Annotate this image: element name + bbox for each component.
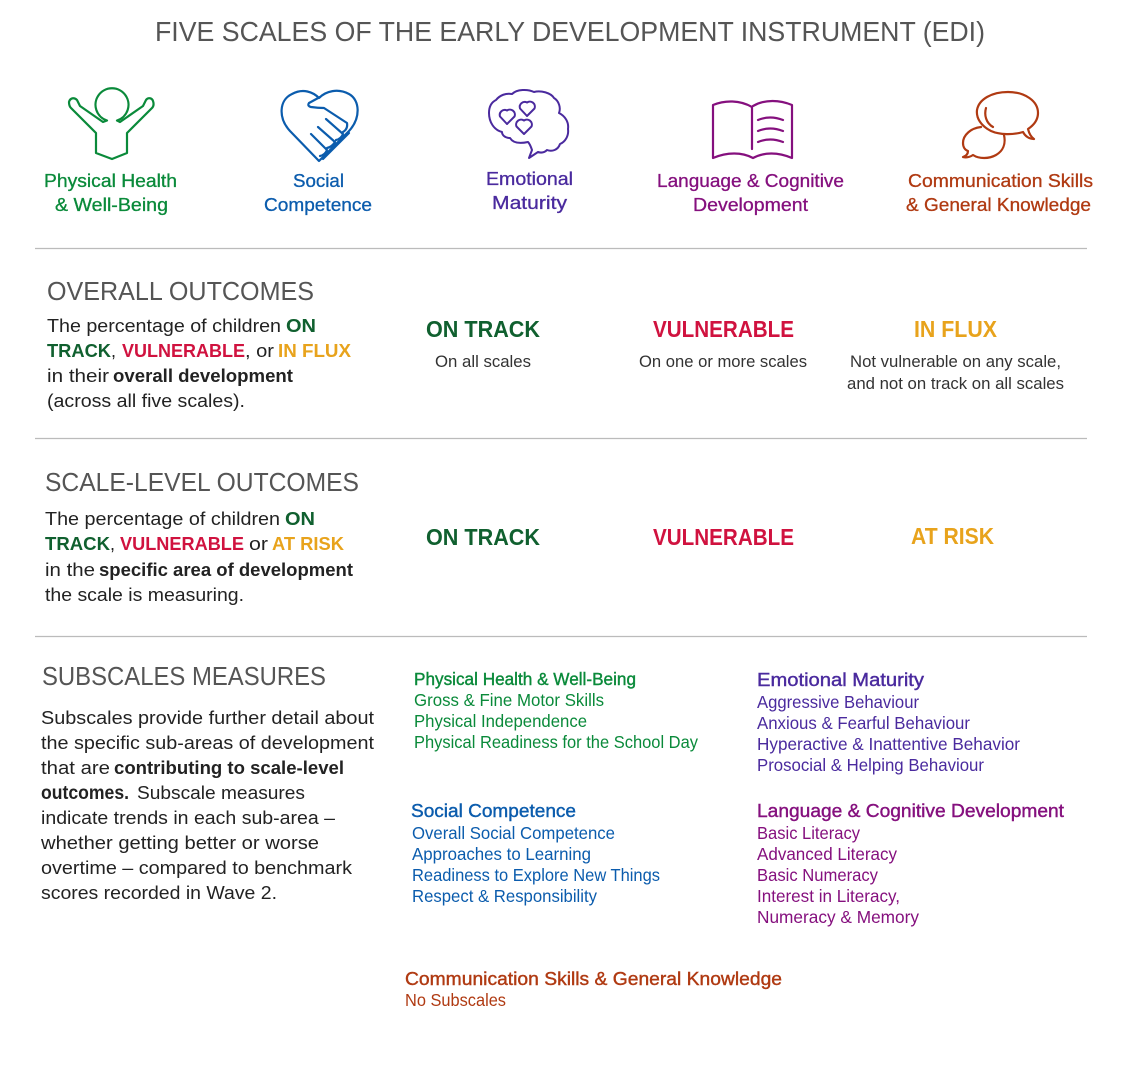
outcome: on track: ON TRACK xyxy=(426,316,540,342)
label: emotional maturity: Emotional xyxy=(486,169,573,189)
label: communication skills: & General Knowledge xyxy=(906,195,1091,215)
list: physical health subscales: Physical Health & Well-Being xyxy=(414,669,636,689)
list: language and cognitive subscales: Basic Literacy xyxy=(757,823,860,843)
text block: subscales description: contributing to scale-level xyxy=(114,758,344,778)
text block: subscales description: whether getting better or worse xyxy=(40,833,319,853)
text block: scale-level description: or xyxy=(249,534,268,554)
outcome: vulnerable: VULNERABLE xyxy=(653,316,794,342)
text block: scale-level description: TRACK xyxy=(45,534,110,554)
text block: scale-level description: AT RISK xyxy=(272,534,344,554)
icon: person with raised arms xyxy=(69,88,154,159)
text block: overall outcomes description: The percentage of children xyxy=(47,316,281,336)
text block: subscales description: Subscale measures xyxy=(137,783,305,803)
list: physical health subscales xyxy=(414,669,698,752)
outcome: vulnerable xyxy=(639,316,807,371)
text block: overall outcomes description: in their xyxy=(47,366,109,386)
list: emotional maturity subscales xyxy=(757,670,1020,775)
text block: subscales description: indicate trends in each sub-area – xyxy=(41,808,335,828)
text block: subscales description: Subscales provide further detail about xyxy=(41,708,374,728)
label: social competence: Competence xyxy=(264,195,372,215)
icon: brain with hearts xyxy=(489,90,568,158)
label: physical health xyxy=(44,171,177,215)
text block: overall outcomes description: , or xyxy=(245,341,274,361)
list: emotional maturity subscales: Emotional Maturity xyxy=(757,670,924,690)
icon: speech bubbles xyxy=(963,92,1038,158)
outcome: at risk: AT RISK xyxy=(911,523,994,549)
label: emotional maturity xyxy=(486,169,573,213)
text block: subscales description: overtime – compared to benchmark xyxy=(41,858,353,878)
list: language and cognitive subscales: Numeracy & Memory xyxy=(757,907,919,927)
outcome: in flux: IN FLUX xyxy=(914,316,998,342)
icon: heart handshake xyxy=(282,91,358,161)
text block: overall outcomes description: IN FLUX xyxy=(278,341,351,361)
label: emotional maturity: Maturity xyxy=(492,193,567,213)
scale: social competence xyxy=(264,91,372,215)
text block: scale-level description: The percentage of children xyxy=(45,509,280,529)
icon: open book xyxy=(713,101,792,158)
outcome: on track xyxy=(426,316,540,371)
outcome: in flux xyxy=(847,316,1064,393)
text block: overall outcomes description: VULNERABLE xyxy=(122,341,245,361)
outcome: vulnerable: On one or more scales xyxy=(639,352,807,371)
outcome: in flux: Not vulnerable on any scale, xyxy=(850,352,1061,371)
label: language and cognitive development: Language & Cognitive xyxy=(657,171,844,191)
list: emotional maturity subscales: Aggressive Behaviour xyxy=(757,692,919,712)
list: social competence subscales: Respect & Responsibility xyxy=(412,886,597,906)
text block: overall outcomes description: (across all five scales). xyxy=(47,391,245,411)
text block: overall outcomes description: TRACK xyxy=(47,341,111,361)
list: language and cognitive subscales: Language & Cognitive Development xyxy=(757,801,1064,821)
list: social competence subscales: Approaches to Learning xyxy=(412,844,591,864)
list: language and cognitive subscales: Advanced Literacy xyxy=(757,844,897,864)
scale: emotional maturity xyxy=(486,90,573,213)
list: communication skills subscales: No Subscales xyxy=(405,990,506,1010)
text block: scale-level description: in the xyxy=(45,560,95,580)
list: physical health subscales: Physical Independence xyxy=(414,711,587,731)
list: language and cognitive subscales xyxy=(757,801,1064,927)
list: social competence subscales: Readiness to Explore New Things xyxy=(412,865,660,885)
title: FIVE SCALES OF THE EARLY DEVELOPMENT INSTRUMENT (EDI) xyxy=(155,16,985,47)
outcome: vulnerable: VULNERABLE xyxy=(653,524,794,550)
text block: overall outcomes description: , xyxy=(111,341,116,361)
heading: scale-level outcomes: SCALE-LEVEL OUTCOMES xyxy=(45,467,359,497)
text block: subscales description: that are xyxy=(41,758,110,778)
label: social competence xyxy=(264,171,372,215)
list: social competence subscales: Social Competence xyxy=(411,801,576,821)
text block: overall outcomes description xyxy=(47,316,351,411)
text block: subscales description: the specific sub-areas of development xyxy=(41,733,374,753)
label: social competence: Social xyxy=(293,171,344,191)
label: physical health: & Well-Being xyxy=(55,195,168,215)
panel: scale-level outcomes xyxy=(45,467,994,605)
text block: subscales description: scores recorded in Wave 2. xyxy=(41,883,277,903)
text block: scale-level description: VULNERABLE xyxy=(120,534,244,554)
list: communication skills subscales: Communication Skills & General Knowledge xyxy=(405,969,782,989)
text block: scale-level description: specific area of development xyxy=(99,560,353,580)
scale: physical health xyxy=(44,88,177,215)
label: physical health: Physical Health xyxy=(44,171,177,191)
scale: communication skills and general knowledge xyxy=(906,92,1093,215)
list: physical health subscales: Gross & Fine Motor Skills xyxy=(414,690,604,710)
text block: subscales description: outcomes. xyxy=(41,783,129,804)
outcome: on track: ON TRACK xyxy=(426,524,540,550)
panel: overall outcomes xyxy=(47,276,1064,411)
label: communication skills xyxy=(906,171,1093,215)
list: social competence subscales xyxy=(411,801,660,906)
scale: language and cognitive development xyxy=(657,101,844,215)
outcome: on track: On all scales xyxy=(435,352,531,371)
text block: overall outcomes description: ON xyxy=(286,316,316,336)
outcome: in flux: and not on track on all scales xyxy=(847,374,1064,393)
label: communication skills: Communication Skills xyxy=(908,171,1093,191)
list: language and cognitive subscales: Interest in Literacy, xyxy=(757,886,900,906)
list: social competence subscales: Overall Social Competence xyxy=(412,823,615,843)
list: language and cognitive subscales: Basic Numeracy xyxy=(757,865,878,885)
list: emotional maturity subscales: Prosocial & Helping Behaviour xyxy=(757,755,984,775)
label: language and cognitive development xyxy=(657,171,844,215)
panel: subscales measures xyxy=(40,661,1064,1010)
label: language and cognitive development: Development xyxy=(693,195,808,215)
text block: scale-level description: ON xyxy=(285,509,315,529)
heading: subscales measures: SUBSCALES MEASURES xyxy=(42,661,326,691)
list: physical health subscales: Physical Readiness for the School Day xyxy=(414,732,698,752)
text block: scale-level description xyxy=(45,509,353,605)
heading: overall outcomes: OVERALL OUTCOMES xyxy=(47,276,314,306)
text block: scale-level description: , xyxy=(110,534,115,554)
text block: overall outcomes description: overall development xyxy=(113,366,293,386)
list: emotional maturity subscales: Anxious & Fearful Behaviour xyxy=(757,713,970,733)
list: emotional maturity subscales: Hyperactive & Inattentive Behavior xyxy=(757,734,1020,754)
text block: subscales description xyxy=(40,708,374,903)
list: communication skills subscales xyxy=(405,969,782,1010)
text block: scale-level description: the scale is measuring. xyxy=(45,585,244,605)
